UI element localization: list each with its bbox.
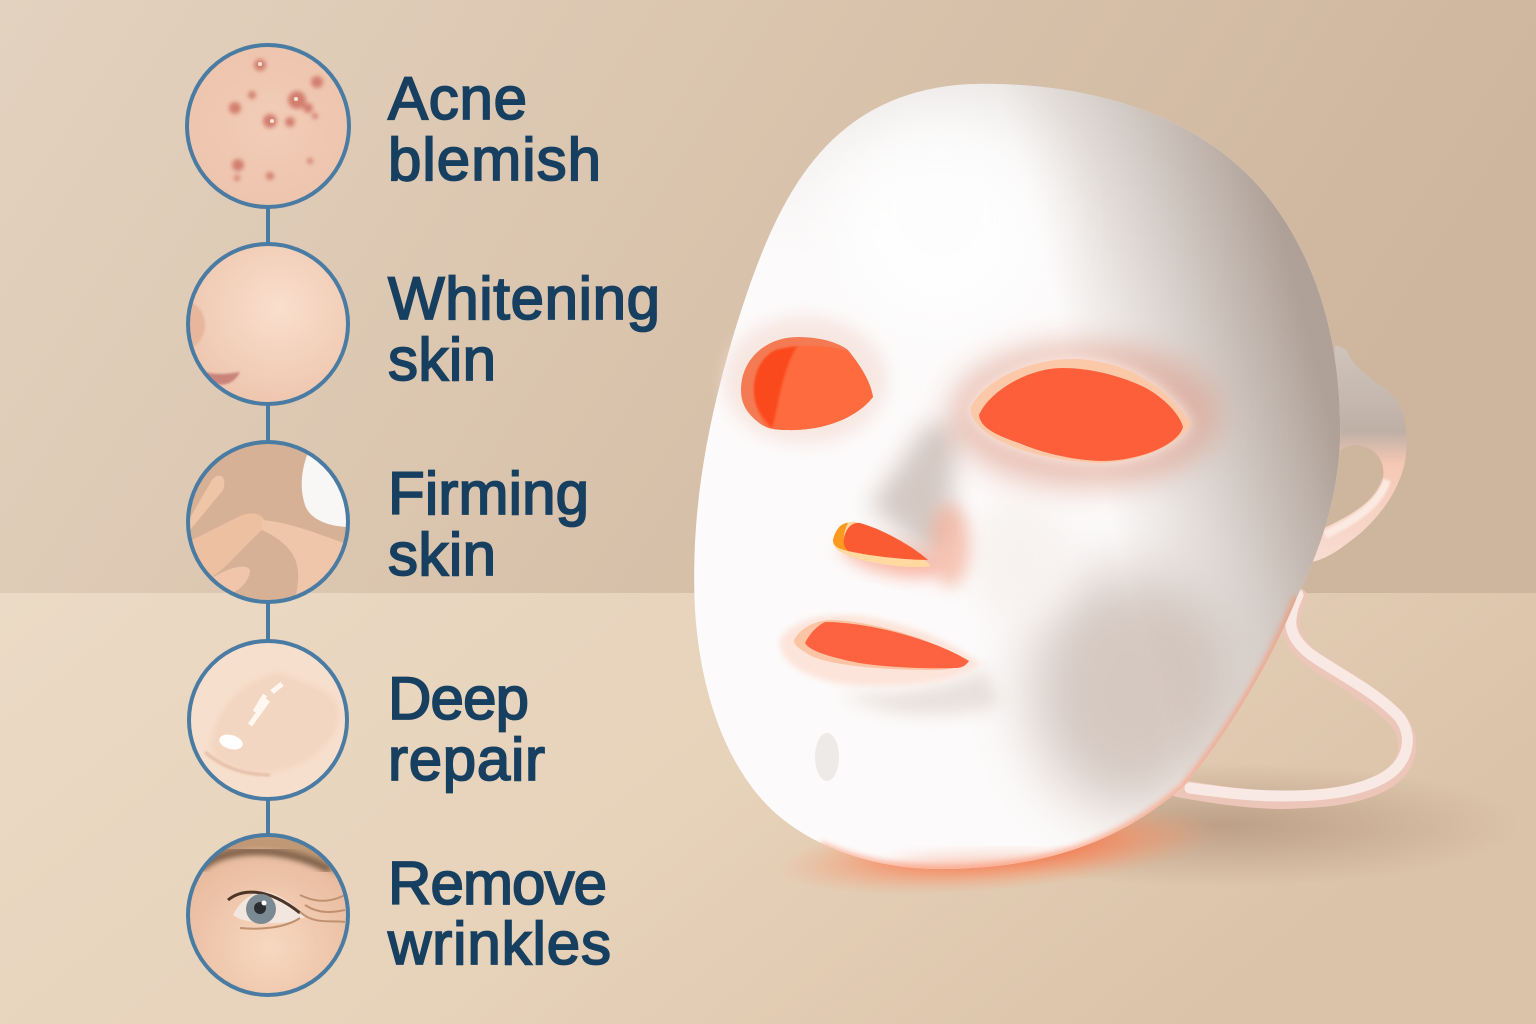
label: firming skin: skin (388, 521, 496, 588)
circle: whitening skin (186, 242, 350, 406)
under-lip shadow (840, 670, 1000, 714)
circle: deep repair cream (185, 638, 355, 803)
nose side shadow (870, 425, 958, 560)
label: remove wrinkles: wrinkles (387, 910, 611, 977)
label: whitening skin: skin (388, 326, 496, 393)
circle: remove wrinkles (185, 832, 355, 997)
edge glow (820, 597, 1297, 869)
label: firming skin (388, 460, 589, 588)
cheek highlight (985, 516, 1047, 590)
label: acne blemish: blemish (388, 126, 601, 193)
face mask (690, 80, 1350, 880)
label: acne blemish: Acne (388, 65, 527, 132)
floor shadow (920, 763, 1520, 887)
floor glow (772, 791, 1228, 909)
label: remove wrinkles (387, 850, 611, 977)
label: firming skin: Firming (388, 460, 589, 527)
label: remove wrinkles: Remove (388, 850, 607, 917)
lower cheek shadow (1030, 570, 1230, 810)
label: whitening skin: Whitening (388, 265, 660, 332)
label: deep repair (388, 665, 545, 793)
nose red glow (930, 503, 970, 587)
connector line (266, 205, 270, 840)
right eye opening (950, 343, 1220, 487)
label: acne blemish (388, 65, 601, 193)
forehead highlight (882, 122, 1000, 186)
circle: acne blemish (180, 40, 360, 210)
chin glow (892, 847, 1062, 869)
mouth opening (780, 615, 980, 686)
background wall (0, 0, 1536, 596)
table surface (0, 593, 1536, 1024)
left eye opening (723, 316, 887, 444)
chin highlight (815, 733, 839, 781)
label: whitening skin (388, 265, 660, 393)
label: deep repair: repair (388, 726, 545, 793)
circle: firming skin (186, 440, 350, 604)
cable (1178, 595, 1407, 800)
nostril opening (833, 522, 942, 586)
label: deep repair: Deep (388, 665, 529, 732)
strap loop (1312, 345, 1406, 562)
